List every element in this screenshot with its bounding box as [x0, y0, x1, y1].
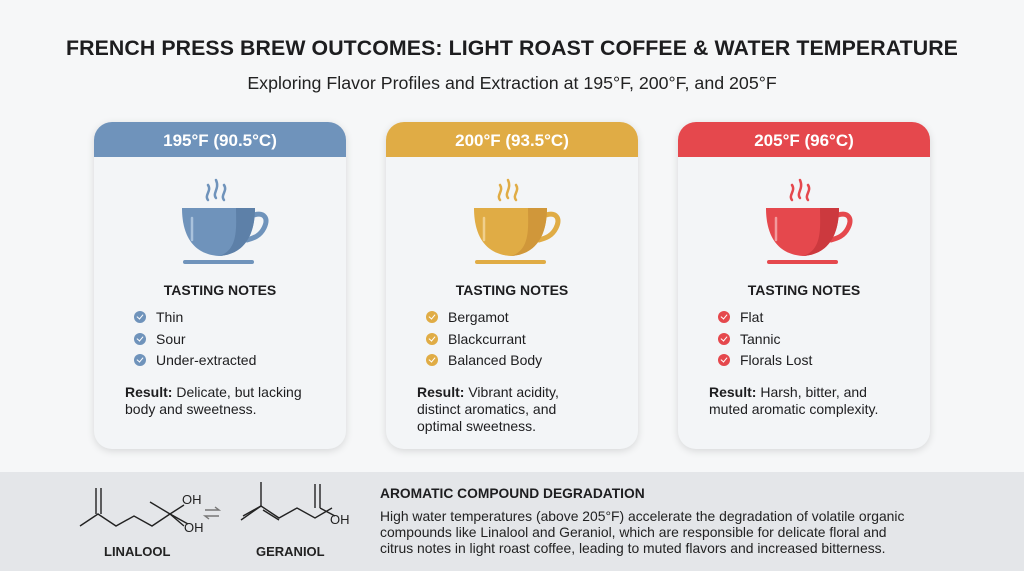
header 205: 205°F (96°C): [754, 131, 854, 150]
header 205: [678, 122, 930, 157]
tasting notes heading: TASTING NOTES: [456, 282, 568, 298]
degradation text: High water temperatures (above 205°F) accelerate the degradation of volatile organic: [380, 508, 904, 524]
result: body and sweetness.: [125, 401, 257, 417]
icon: red cup: [766, 178, 852, 264]
icon: blue cup: [182, 178, 268, 264]
panel: 205F: Florals Lost: [740, 352, 812, 368]
result: Result: Delicate, but lacking: [125, 384, 302, 400]
panel: 195F: [94, 122, 346, 449]
result: [417, 384, 559, 434]
result: optimal sweetness.: [417, 418, 536, 434]
result: distinct aromatics, and: [417, 401, 556, 417]
panel: 200F: Balanced Body: [448, 352, 542, 368]
degradation text: citrus notes in light roast coffee, leading to muted flavors and increased bitterness.: [380, 540, 886, 556]
bottom band: [0, 472, 1024, 571]
icon: gold cup: [474, 178, 560, 264]
chemical structures: [80, 482, 350, 559]
panel: 200F: [386, 122, 638, 449]
result: Result: Harsh, bitter, and: [709, 384, 867, 400]
subtitle: Exploring Flavor Profiles and Extraction at 195°F, 200°F, and 205°F: [247, 73, 777, 93]
result: muted aromatic complexity.: [709, 401, 878, 417]
degradation text: AROMATIC COMPOUND DEGRADATION: [380, 486, 645, 501]
header 195: 195°F (90.5°C): [163, 131, 277, 150]
result: [125, 384, 302, 417]
chemical structures: OH: [184, 520, 204, 535]
result: Result: Vibrant acidity,: [417, 384, 559, 400]
header 200: [386, 122, 638, 157]
list: [718, 309, 764, 325]
list: Thin: [156, 309, 183, 325]
panel: 195F: Sour: [156, 331, 186, 347]
panel: 195F: Under-extracted: [156, 352, 256, 368]
tasting notes heading: TASTING NOTES: [164, 282, 276, 298]
chemical structures: LINALOOL: [104, 544, 170, 559]
panel: 200F: Blackcurrant: [448, 331, 526, 347]
panel: 205F: [678, 122, 930, 449]
panel: 205F: Tannic: [740, 331, 780, 347]
chemical structures: OH: [330, 512, 350, 527]
header 200: 200°F (93.5°C): [455, 131, 569, 150]
chemical structures: GERANIOL: [256, 544, 325, 559]
tasting notes heading: TASTING NOTES: [748, 282, 860, 298]
degradation text: compounds like Linalool and Geraniol, which are responsible for delicate floral and: [380, 524, 887, 540]
header 195: [94, 122, 346, 157]
chemical structures: OH: [182, 492, 202, 507]
list: Flat: [740, 309, 763, 325]
list: Bergamot: [448, 309, 509, 325]
list: [134, 309, 183, 325]
degradation text: [380, 486, 904, 556]
result: [709, 384, 878, 417]
title: FRENCH PRESS BREW OUTCOMES: LIGHT ROAST COFFEE & WATER TEMPERATURE: [66, 36, 958, 60]
